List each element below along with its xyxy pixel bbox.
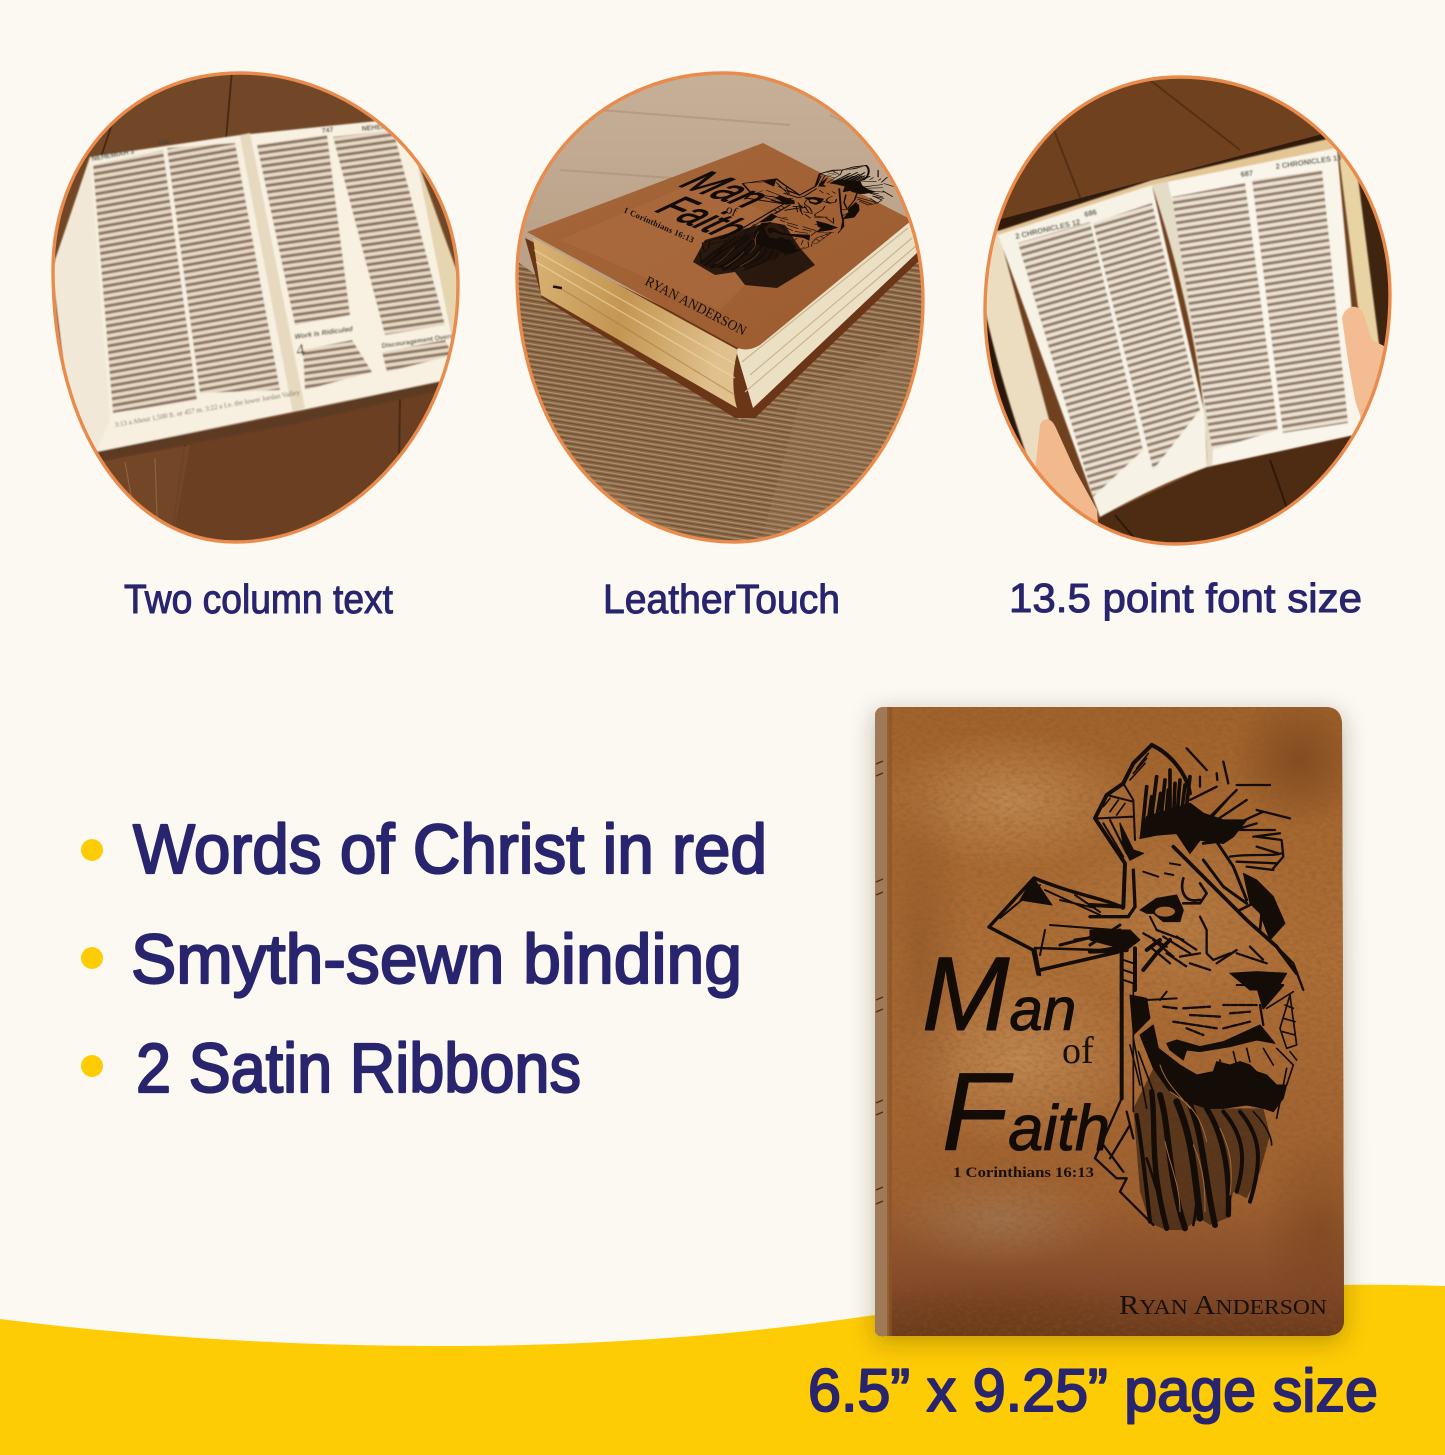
photo ring <box>53 73 458 542</box>
page headings <box>91 122 468 429</box>
open bible <box>52 120 468 462</box>
cover title text <box>624 171 764 336</box>
hand: right <box>1342 306 1384 418</box>
page size caption: 6.5” x 9.25” page size <box>808 1357 1378 1424</box>
page headings: 2 CHRONICLES 13 <box>1275 153 1342 171</box>
cover title text: Faith <box>645 190 760 246</box>
page text columns <box>1018 170 1348 497</box>
panel: leather bible photo <box>515 70 925 545</box>
wood table background <box>983 75 1393 547</box>
page headings: NEHEMIAH <box>361 122 399 133</box>
cover title text: Man <box>669 165 783 214</box>
lion and cross engraving <box>989 745 1303 1230</box>
open bible held in hands <box>982 136 1380 517</box>
cover title text: 1 Corinthians 16:13 <box>622 205 696 245</box>
spine hinge <box>874 707 892 1337</box>
cover title text: of <box>724 201 740 220</box>
leather surface <box>875 707 1344 1336</box>
bullet 2 <box>81 947 103 969</box>
cover title: man of faith: of <box>1062 1030 1094 1072</box>
cover title: man of faith: Faith <box>942 1051 1110 1174</box>
page headings: NEHEMIAH 3 <box>91 149 135 163</box>
caption: two column text: Two column text <box>124 576 394 622</box>
page headings <box>1014 153 1342 241</box>
page headings: 746 <box>157 139 170 148</box>
page headings: 687 <box>1240 168 1254 179</box>
closed bible <box>525 143 925 418</box>
cover title text: RYAN ANDERSON <box>642 274 748 339</box>
yellow wave band <box>0 1285 1445 1455</box>
photo ring <box>985 77 1390 544</box>
feature list <box>81 810 767 1107</box>
engraved lion <box>693 165 894 288</box>
page headings: 2 CHRONICLES 12 <box>1014 217 1081 241</box>
page headings: 686 <box>1083 207 1098 219</box>
cover title: man of faith <box>922 936 1327 1320</box>
feature: words of christ: Words of Christ in red <box>133 810 767 888</box>
photo ring <box>517 73 923 542</box>
bullet 1 <box>81 839 103 861</box>
page headings: 4 <box>295 340 306 360</box>
caption: leathertouch: LeatherTouch <box>603 576 840 622</box>
wood table background <box>50 70 460 545</box>
lion muzzle and mane <box>1095 985 1297 1230</box>
page headings: 3:13 a About 1,500 ft. or 457 m. 3:22 a I.e. the lower Jordan Valley <box>114 388 301 429</box>
hand: left <box>1035 419 1098 525</box>
caption: font size: 13.5 point font size <box>1009 575 1362 621</box>
cover title: man of faith: Man <box>922 936 1076 1053</box>
panel: large font photo <box>982 75 1393 547</box>
cover title: man of faith: 1 Corinthians 16:13 <box>953 1165 1094 1181</box>
leather bible cover <box>860 698 1358 1356</box>
page headings: 747 <box>321 127 334 135</box>
feature: satin ribbons: 2 Satin Ribbons <box>136 1029 581 1107</box>
cover title: man of faith: RYAN ANDERSON <box>1119 1290 1327 1320</box>
lion upper head <box>1090 745 1303 990</box>
bullet 3 <box>81 1055 103 1077</box>
wood floor background <box>515 70 925 545</box>
feature: smyth-sewn binding: Smyth-sewn binding <box>131 920 742 998</box>
page headings: Work Is Ridiculed <box>294 326 354 341</box>
page headings: Discouragement Overcome <box>381 331 468 350</box>
cross arm <box>989 878 1125 975</box>
panel: two column text photo <box>50 70 468 545</box>
page text columns <box>93 130 453 413</box>
